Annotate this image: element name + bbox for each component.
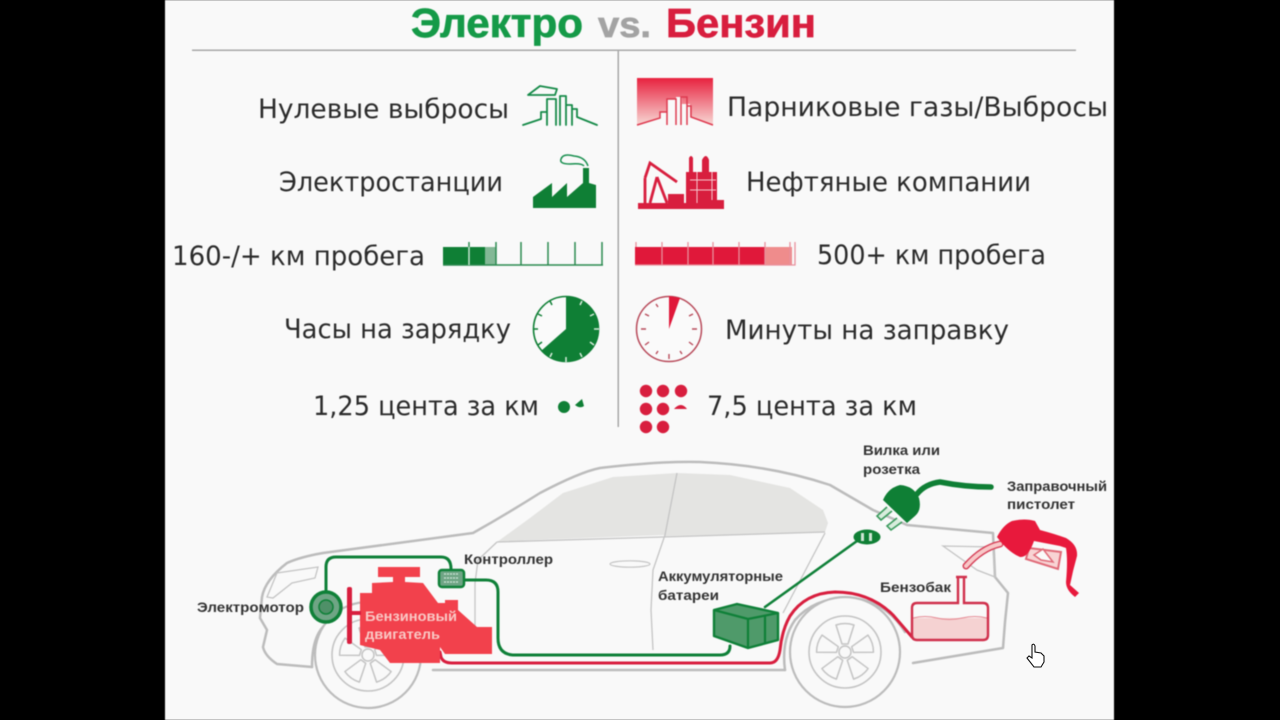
icon: cost dots red: [640, 385, 687, 433]
battery pack: [714, 604, 778, 648]
label: gasoline range: 500+ км пробега: [817, 240, 1046, 271]
label: plug or socket: розетка: [863, 461, 920, 477]
panel: car diagram: [197, 442, 1107, 708]
title: Бензин: [666, 0, 816, 46]
fuel nozzle: [966, 520, 1079, 597]
plug: [877, 482, 991, 530]
label: greenhouse gases: Парниковые газы/Выбросы: [727, 92, 1108, 123]
title: Электро: [411, 0, 583, 46]
panel: electric column: [172, 86, 603, 422]
label: gasoline cost: 7,5 цента за км: [707, 391, 917, 422]
label: power plants: Электростанции: [279, 167, 503, 198]
label: oil companies: Нефтяные компании: [746, 167, 1031, 198]
label: hours to charge: Часы на зарядку: [284, 314, 511, 345]
car body outline: [260, 462, 1008, 670]
icon: clean skyline: [523, 86, 597, 125]
label: controller: Контроллер: [464, 551, 553, 567]
label: zero emissions: Нулевые выбросы: [258, 94, 509, 125]
icon: oil pump and refinery: [638, 156, 724, 209]
icon: green clock: [533, 296, 599, 362]
icon: cost dots green: [558, 399, 584, 413]
label: fuel nozzle: Заправочный: [1007, 478, 1107, 494]
icon: factory: [533, 155, 596, 208]
icon: red clock: [636, 296, 702, 362]
label: minutes to refuel: Минуты на заправку: [725, 315, 1009, 346]
label: electric cost: 1,25 цента за км: [313, 391, 539, 422]
front wheel: [315, 602, 421, 708]
panel: gasoline column: [635, 78, 1108, 433]
label: plug or socket: Вилка или: [863, 442, 940, 458]
label: fuel nozzle: пистолет: [1007, 496, 1075, 512]
slide background: [165, 0, 1114, 720]
charging socket: [854, 530, 880, 544]
title: vs.: [598, 4, 651, 45]
label: fuel tank: Бензобак: [880, 579, 952, 595]
electric motor: [311, 592, 341, 622]
icon: gasoline range bar: [635, 242, 795, 265]
fuel line: [440, 592, 912, 663]
rear wheel: [790, 597, 900, 707]
gasoline engine: [347, 567, 492, 663]
icon: hand cursor: [1027, 644, 1044, 667]
label: gasoline engine: Бензиновый: [365, 608, 457, 624]
label: batteries: батареи: [658, 587, 719, 603]
label: electric range: 160-/+ км пробега: [172, 241, 425, 272]
icon: electric range bar: [443, 242, 603, 265]
label: batteries: Аккумуляторные: [658, 568, 783, 584]
fuel tank: [912, 577, 988, 640]
electric wiring: [326, 541, 857, 655]
controller: [439, 570, 464, 587]
title: [411, 0, 816, 46]
icon: smog skyline: [637, 78, 713, 126]
label: electric motor: Электромотор: [197, 599, 304, 615]
label: gasoline engine: двигатель: [365, 626, 440, 642]
